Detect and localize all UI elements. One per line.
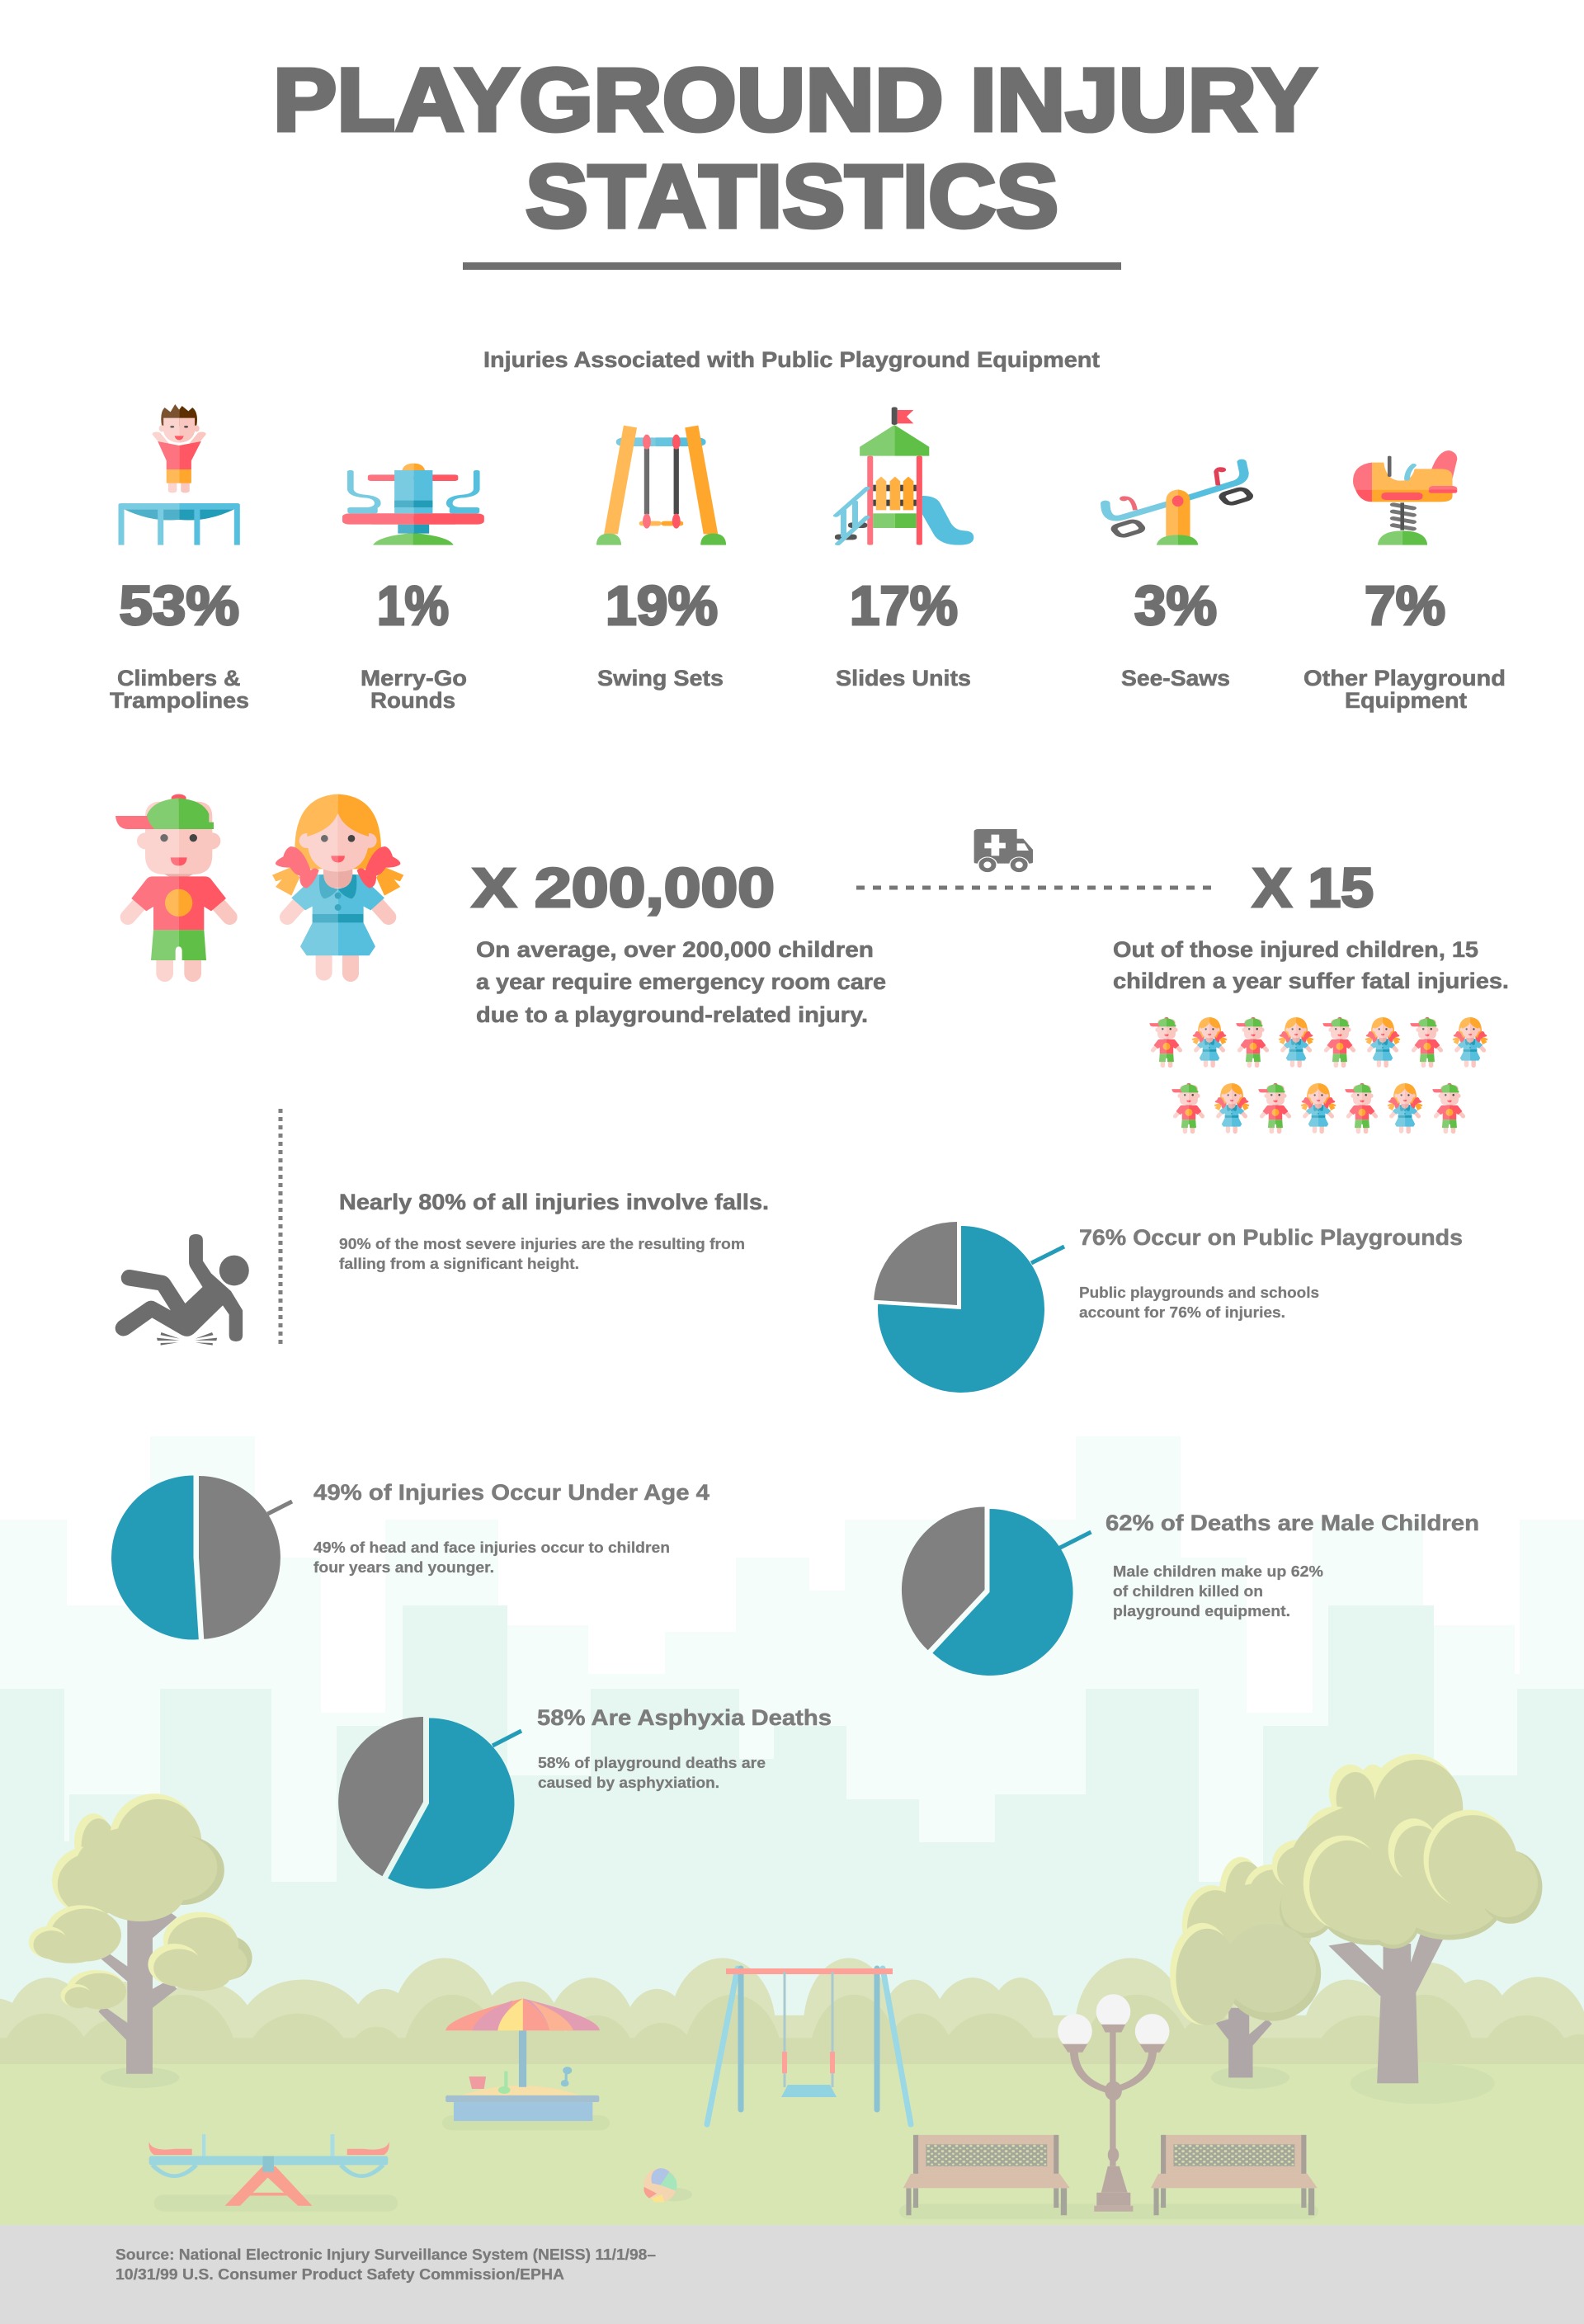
pie chart: 49% under age 4 <box>111 1475 292 1640</box>
text: 76% public playgrounds: account for 76% of injuries. <box>1079 1303 1285 1321</box>
illustration: middle tree lower canopy <box>1170 1923 1321 2025</box>
text: 62% male children: 62% of Deaths are Male Children <box>1106 1511 1479 1535</box>
icon: ambulance <box>974 829 1033 873</box>
illustration: swing set <box>707 1968 911 2124</box>
text: 76% public playgrounds <box>1079 1225 1463 1321</box>
text: fatal injuries <box>1113 937 1509 993</box>
icon row: fifteen children <box>1149 1017 1487 1134</box>
title underline <box>463 262 1121 270</box>
label: Equipment <box>1345 688 1467 713</box>
label <box>110 666 249 713</box>
text: 49% under age 4: 49% of Injuries Occur Under Age 4 <box>314 1480 710 1505</box>
source text: 10/31/99 U.S. Consumer Product Safety Commission/EPHA <box>116 2265 564 2283</box>
label: Other Playground <box>1304 666 1506 691</box>
icon: see-saw <box>1106 462 1252 545</box>
percentage: 7% <box>1365 575 1445 637</box>
icon: swing set <box>596 426 726 545</box>
panel: swing sets <box>596 426 726 691</box>
illustration: beach ball <box>644 2168 692 2202</box>
source text: Source: National Electronic Injury Surveillance System (NEISS) 11/1/98– <box>116 2246 656 2263</box>
icon: merry-go-round <box>342 464 484 545</box>
panel: other playground equipment <box>1304 450 1506 713</box>
icon: spring rider plane <box>1353 450 1457 545</box>
label: Swing Sets <box>597 666 724 691</box>
text: 58% asphyxia: 58% of playground deaths are <box>538 1754 766 1771</box>
text: 62% male children: of children killed on <box>1113 1582 1263 1600</box>
text: fatal injuries: Out of those injured children, 15 <box>1113 937 1478 962</box>
percentage: 1% <box>377 575 449 637</box>
label: See-Saws <box>1121 666 1230 691</box>
icon: girl <box>272 794 403 982</box>
text: 76% public playgrounds: 76% Occur on Public Playgrounds <box>1079 1225 1463 1250</box>
label: Merry-Go <box>361 666 467 691</box>
footer band <box>0 2225 1584 2324</box>
illustration: sandbox with umbrella <box>442 1998 610 2130</box>
title <box>273 49 1317 246</box>
label: Climbers & <box>117 666 241 691</box>
text: 62% male children <box>1106 1511 1479 1619</box>
text: emergency room care: due to a playground-related injury. <box>476 1002 868 1027</box>
text: 58% asphyxia <box>537 1705 832 1791</box>
label <box>1304 666 1506 713</box>
stat: 15: X 15 <box>1252 857 1374 919</box>
text: emergency room care: a year require emergency room care <box>476 969 886 994</box>
text: 49% under age 4: four years and younger. <box>314 1558 494 1576</box>
dotted connector <box>856 886 1212 889</box>
pie chart: 62% male children <box>902 1506 1091 1676</box>
panel: see-saws <box>1106 462 1252 691</box>
text: 58% asphyxia: 58% Are Asphyxia Deaths <box>537 1705 832 1730</box>
illustration: middle tree trunk and upper canopy <box>1182 1857 1313 2089</box>
text: emergency room care: On average, over 200,000 children <box>476 937 874 962</box>
panel: slides units <box>835 407 974 691</box>
illustration: benches and street lamp <box>899 1994 1318 2219</box>
illustration: large right tree <box>1272 1754 1542 2104</box>
panel: merry-go rounds <box>342 464 484 713</box>
background: grass ground <box>0 2064 1584 2226</box>
dotted divider <box>279 1109 282 1346</box>
text: falls: Nearly 80% of all injuries involve falls. <box>339 1190 769 1214</box>
label <box>361 666 467 713</box>
panel: climbers and trampolines <box>110 404 249 713</box>
background: pale city skyline <box>0 1436 1584 2145</box>
title: PLAYGROUND INJURY <box>273 49 1317 149</box>
stat: 200,000: X 200,000 <box>472 857 775 919</box>
pie chart: 58% asphyxia <box>338 1717 521 1889</box>
text: emergency room care <box>476 937 886 1027</box>
text: 49% under age 4: 49% of head and face injuries occur to children <box>314 1539 670 1556</box>
text: 76% public playgrounds: Public playgrounds and schools <box>1079 1284 1319 1301</box>
percentage: 53% <box>119 575 239 637</box>
percentage: 17% <box>850 575 958 637</box>
illustration: left tree <box>29 1794 252 2088</box>
background: hedge hills <box>0 1958 1584 2134</box>
text: 49% under age 4 <box>314 1480 710 1576</box>
pie chart: 76% public playgrounds <box>874 1222 1064 1393</box>
icon: slide tower <box>835 407 974 545</box>
illustration: teeter seesaw <box>148 2134 398 2212</box>
icon: child on trampoline <box>118 404 240 545</box>
icon: falling person <box>116 1234 249 1346</box>
label: Slides Units <box>836 666 971 691</box>
text: 58% asphyxia: caused by asphyxiation. <box>538 1774 719 1791</box>
text: fatal injuries: children a year suffer fatal injuries. <box>1113 969 1509 993</box>
text: falls <box>339 1190 769 1272</box>
percentage: 3% <box>1134 575 1217 637</box>
title: STATISTICS <box>526 146 1058 246</box>
label: Trampolines <box>110 688 249 713</box>
text: 62% male children: playground equipment. <box>1113 1602 1290 1619</box>
source text <box>116 2246 656 2283</box>
percentage: 19% <box>606 575 718 637</box>
icon: boy <box>116 794 229 982</box>
subtitle: Injuries Associated with Public Playground Equipment <box>483 347 1100 372</box>
label: Rounds <box>370 688 455 713</box>
text: falls: 90% of the most severe injuries are the resulting from <box>339 1235 745 1252</box>
text: falls: falling from a significant height. <box>339 1255 579 1272</box>
text: 62% male children: Male children make up 62% <box>1113 1563 1323 1580</box>
